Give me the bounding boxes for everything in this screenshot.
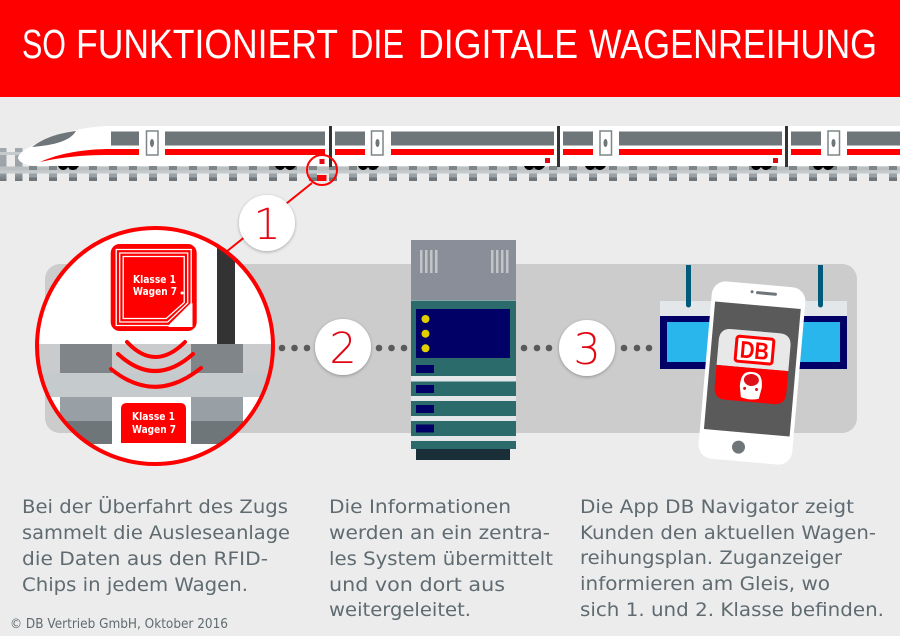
train xyxy=(18,126,900,170)
windshield xyxy=(32,131,76,147)
text: step 1: Bei der Überfahrt des Zugs xyxy=(22,495,288,518)
status lights xyxy=(422,315,430,352)
text: step 2: werden an ein zentra- xyxy=(329,522,550,544)
railway track xyxy=(0,148,900,181)
step 2 badge xyxy=(315,319,371,375)
title banner: DIE xyxy=(350,21,404,67)
server slots xyxy=(416,365,434,432)
server display xyxy=(416,309,510,358)
red stripe xyxy=(40,149,139,162)
train doors xyxy=(146,131,840,155)
highlight circle on train xyxy=(307,155,337,185)
train body xyxy=(18,126,900,166)
step 3 badge: 3 xyxy=(573,325,601,375)
text: step 2 xyxy=(329,496,553,621)
RFID reader label: Wagen 7 xyxy=(132,423,176,436)
text: step 2: und von dort aus xyxy=(329,574,505,596)
RFID reader label: Klasse 1 xyxy=(132,410,175,423)
train wheels xyxy=(58,166,834,170)
step 1 badge xyxy=(239,195,295,251)
RFID reader label xyxy=(121,403,186,443)
RFID tag xyxy=(111,244,197,331)
train windows xyxy=(111,132,900,146)
title banner xyxy=(0,0,900,97)
text: step 1 xyxy=(22,495,290,596)
RFID tag: Klasse 1 xyxy=(133,273,176,286)
title banner: FUNKTIONIERT xyxy=(76,21,338,67)
title banner: SO xyxy=(22,21,66,67)
title banner: DIGITALE xyxy=(418,21,578,67)
phone speaker xyxy=(750,290,777,296)
connector line xyxy=(226,183,312,252)
step 2 badge: 2 xyxy=(329,324,357,374)
smartphone xyxy=(697,280,807,466)
text: step 3: Die App DB Navigator zeigt xyxy=(580,496,854,518)
text: step 3: sich 1. und 2. Klasse befinden. xyxy=(580,599,884,621)
text: step 2: weitergeleitet. xyxy=(329,599,471,621)
home button xyxy=(731,440,746,454)
server rack xyxy=(411,240,516,460)
train front icon xyxy=(739,371,763,400)
gray background panel xyxy=(45,264,857,433)
text: step 1: die Daten aus den RFID- xyxy=(22,548,268,570)
platform display xyxy=(660,265,847,369)
text: step 3: reihungsplan. Zuganzeiger xyxy=(580,547,842,569)
text: step 2: Die Informationen xyxy=(329,496,511,518)
RFID chips on train xyxy=(320,158,778,164)
text: step 1: Chips in jedem Wagen. xyxy=(22,574,248,596)
connector dots xyxy=(279,345,652,351)
text: step 3: informieren am Gleis, wo xyxy=(580,573,830,595)
copyright: © DB Vertrieb GmbH, Oktober 2016 xyxy=(10,617,228,632)
step 1 badge: 1 xyxy=(253,200,281,250)
text: step 3: Kunden den aktuellen Wagen- xyxy=(580,522,876,544)
detail circle: RFID reader xyxy=(30,220,280,464)
step 3 badge xyxy=(559,320,615,376)
text: step 2: les System übermittelt xyxy=(329,548,553,570)
app icon xyxy=(714,328,792,405)
server vents xyxy=(420,250,508,273)
DB logo: DB xyxy=(739,336,770,366)
carriage couplings xyxy=(329,126,788,167)
radio waves xyxy=(111,342,201,387)
RFID tag: Wagen 7 xyxy=(133,285,177,298)
text: step 3 xyxy=(580,496,884,621)
text: step 1: sammelt die Ausleseanlage xyxy=(22,522,290,544)
